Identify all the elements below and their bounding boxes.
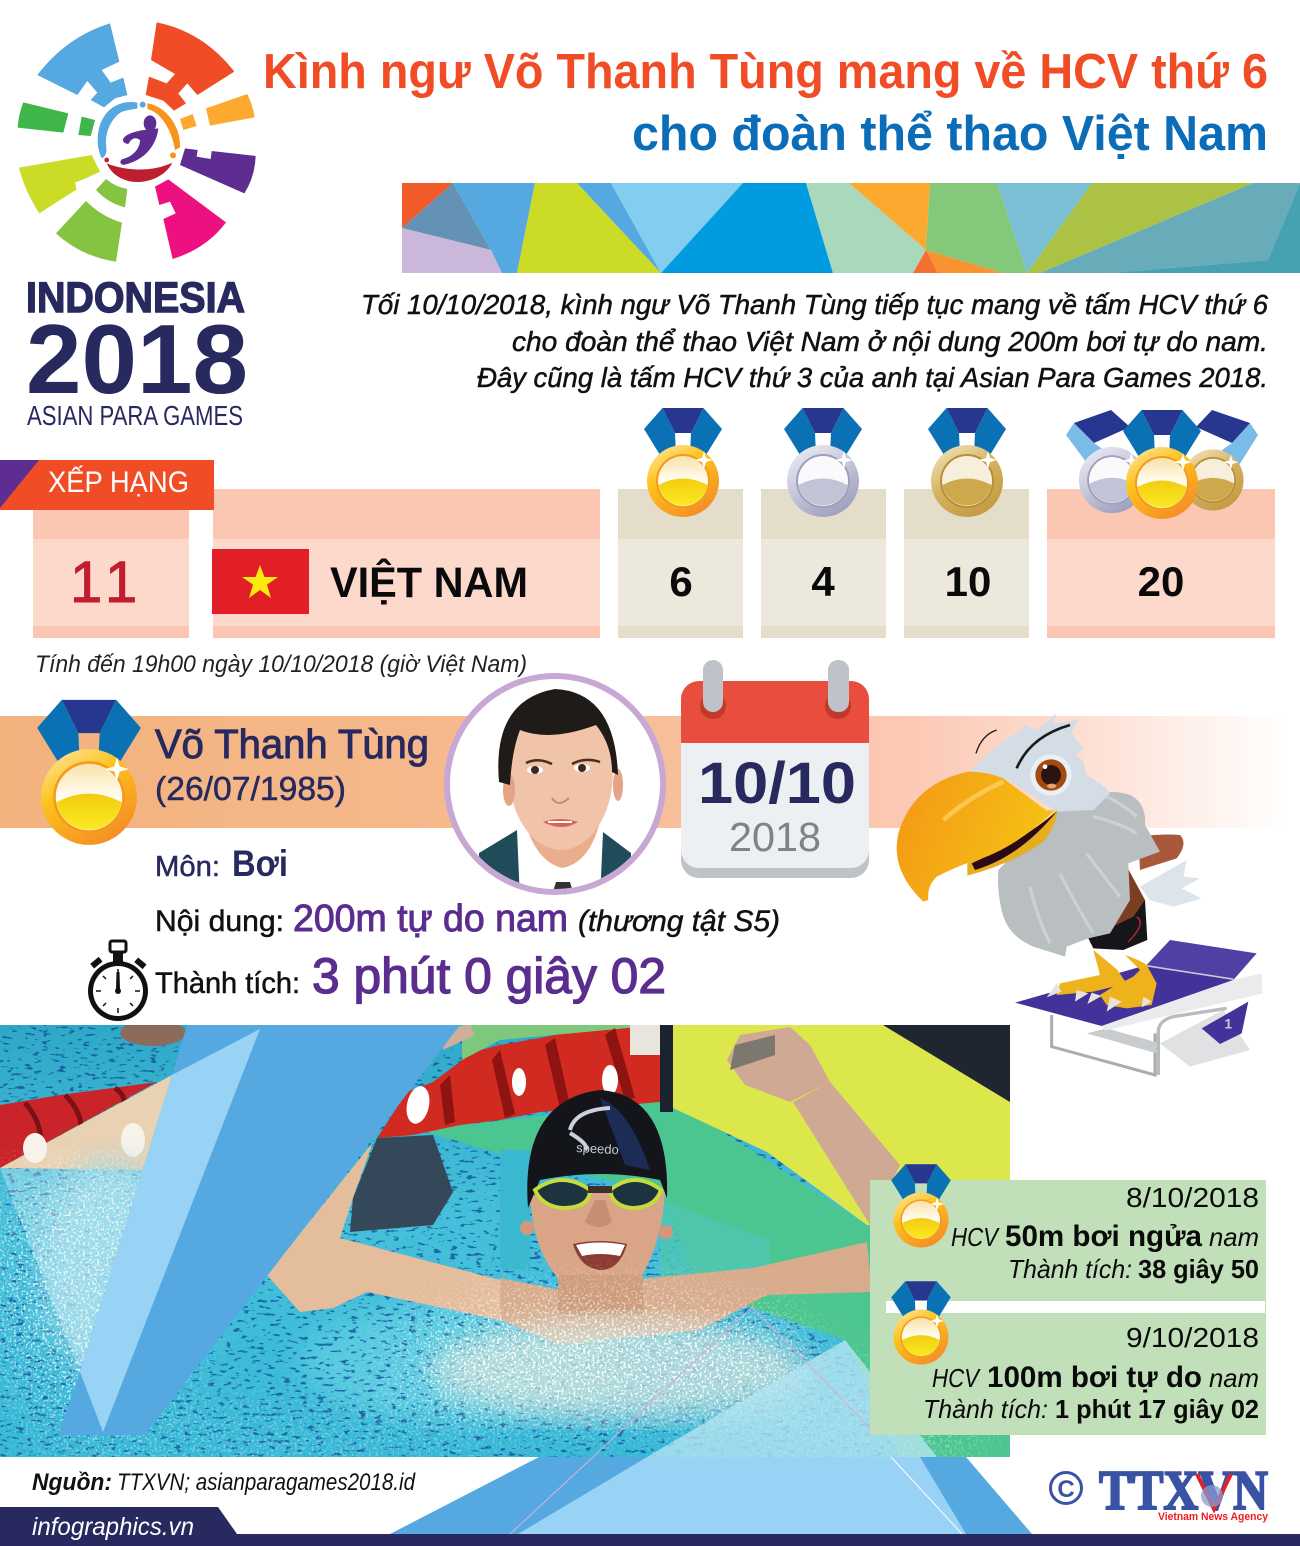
ranking table [33, 489, 1275, 638]
arm and torso [1138, 834, 1183, 870]
logo text: 2018: 2018 [26, 304, 248, 414]
medal entry 1: 50m bơi ngửa [1005, 1220, 1202, 1253]
head [970, 713, 1110, 812]
medal entry 2: nam [1209, 1363, 1259, 1393]
event [155, 898, 780, 940]
athlete name: Võ Thanh Tùng [155, 721, 429, 767]
calendar year: 2018 [729, 814, 821, 860]
smile [573, 1241, 627, 1270]
blue geometric overlay on photo [0, 1025, 937, 1457]
body feathers [998, 792, 1160, 957]
icon: medal 2 [891, 1281, 951, 1365]
footer bar [0, 1507, 1300, 1546]
event: Nội dung: [155, 905, 284, 938]
athlete band [0, 716, 1300, 828]
TTXVN logo [1050, 1460, 1269, 1523]
athlete birth date: (26/07/1985) [155, 770, 346, 807]
dark splash region [350, 1135, 453, 1232]
bronze count cell: 10 [945, 558, 991, 605]
icon: silver medal [784, 408, 862, 517]
bronze count cell [904, 489, 1029, 638]
title line 2: cho đoàn thể thao Việt Nam [632, 107, 1268, 161]
intro paragraph: cho đoàn thể thao Việt Nam ở nội dung 200m bơi tự do nam. [512, 326, 1268, 357]
goggles [535, 1180, 661, 1208]
medal entry 1: nam [1209, 1222, 1259, 1252]
lane rope right [377, 1025, 660, 1138]
mascot: eagle on starting block [897, 713, 1263, 1075]
medal entry 2: 9/10/2018 [1126, 1322, 1259, 1353]
source: TTXVN; asianparagames2018.id [117, 1469, 416, 1496]
swimmer photo [0, 1020, 1010, 1457]
country cell [212, 489, 600, 638]
medal entry 1: Thành tích: [1008, 1254, 1132, 1284]
icon: gold medal [644, 408, 722, 517]
pool wall [673, 1025, 1010, 1240]
shorts [1088, 900, 1147, 950]
intro paragraph [361, 289, 1268, 393]
gold count cell: 6 [669, 558, 693, 605]
upper beak [897, 772, 1055, 902]
medal entry 2: HCV [932, 1363, 981, 1393]
sport: Môn: [155, 851, 220, 883]
left arm [267, 1142, 560, 1320]
country cell: VIỆT NAM [330, 558, 528, 607]
medal entry 2: Thành tích: [923, 1394, 1048, 1424]
footer bar: infographics.vn [32, 1513, 194, 1541]
head [530, 1190, 665, 1278]
silver count cell: 4 [811, 558, 835, 605]
title [263, 45, 1268, 161]
TTXVN logo: TTXVN [1099, 1460, 1268, 1522]
event details [155, 843, 780, 1004]
event: 200m tự do nam [293, 898, 568, 940]
source: Nguồn: [32, 1469, 112, 1496]
logo text: ASIAN PARA GAMES: ASIAN PARA GAMES [27, 400, 243, 431]
swim cap [527, 1090, 667, 1208]
intro paragraph: Tối 10/10/2018, kình ngư Võ Thanh Tùng tiếp tục mang về tấm HCV thứ 6 [361, 289, 1268, 320]
calendar [681, 660, 869, 878]
footer blue trapezoid [390, 1457, 1032, 1534]
medal entry 1: 38 giây 50 [1138, 1254, 1259, 1284]
title line 1: Kình ngư Võ Thanh Tùng mang về HCV thứ 6 [263, 45, 1268, 99]
green water [420, 1100, 1010, 1457]
right arm and fist [727, 1027, 900, 1225]
splash [0, 1150, 1010, 1457]
rank cell: 1 [70, 550, 102, 615]
heading tag: xếp hạng [0, 460, 214, 510]
result: Thành tích: [155, 967, 300, 1000]
total count cell [1047, 489, 1275, 638]
medal entry 1: HCV [951, 1222, 1000, 1252]
calendar date: 10/10 [698, 751, 856, 816]
sport: Bơi [232, 843, 288, 884]
intro paragraph: Đây cũng là tấm HCV thứ 3 của anh tại Asian Para Games 2018. [477, 362, 1268, 393]
icon: medal 1 [891, 1164, 951, 1248]
logo: Indonesia 2018 Asian Para Games [18, 22, 256, 431]
logo text: INDONESIA: INDONESIA [26, 274, 245, 322]
heading tag: xếp hạng: XẾP HẠNG [48, 465, 189, 499]
starting block [1015, 940, 1263, 1075]
shoulders and chest [500, 1242, 872, 1345]
athlete portrait [447, 676, 663, 900]
icon: Vietnam flag [212, 549, 309, 614]
note: update time: Tính đến 19h00 ngày 10/10/2018 (giờ Việt Nam) [35, 651, 527, 678]
lane rope left [0, 1075, 172, 1170]
icon: bronze medal [928, 408, 1006, 517]
sport [155, 843, 288, 884]
swimmer photo: speedo [576, 1140, 619, 1157]
water background [0, 1025, 1010, 1457]
eye [1030, 754, 1072, 796]
source [32, 1469, 416, 1496]
medal entry 2: 1 phút 17 giây 02 [1055, 1394, 1259, 1424]
event: (thương tật S5) [578, 905, 780, 938]
tail [1140, 860, 1202, 907]
rank cell: 1 [105, 550, 137, 615]
silver count cell [761, 489, 886, 638]
result: 3 phút 0 giây 02 [312, 948, 666, 1004]
TTXVN logo: C [1057, 1476, 1075, 1503]
previous medals panel [870, 1164, 1266, 1435]
starting block: 1 [1224, 1015, 1232, 1031]
medal entry 1: 8/10/2018 [1126, 1182, 1259, 1213]
total count cell: 20 [1138, 558, 1184, 605]
medal entry 1 [951, 1182, 1259, 1284]
gold count cell [618, 489, 743, 638]
lower beak [967, 810, 1057, 876]
eyebrows [976, 725, 1070, 768]
logo emblem [18, 22, 256, 262]
calendar page [681, 720, 869, 878]
legs and feet [1057, 950, 1157, 1008]
TTXVN logo: Vietnam News Agency [1158, 1511, 1269, 1523]
icon: athlete gold medal [37, 700, 141, 845]
medal entry 2: 100m bơi tự do [987, 1361, 1202, 1394]
decorative coloured triangles banner [402, 183, 1300, 273]
rank cell [33, 489, 189, 638]
icon: three medals [1066, 410, 1258, 519]
icon: stopwatch [88, 941, 148, 1021]
medal entry 2 [923, 1322, 1259, 1424]
result [155, 948, 666, 1004]
